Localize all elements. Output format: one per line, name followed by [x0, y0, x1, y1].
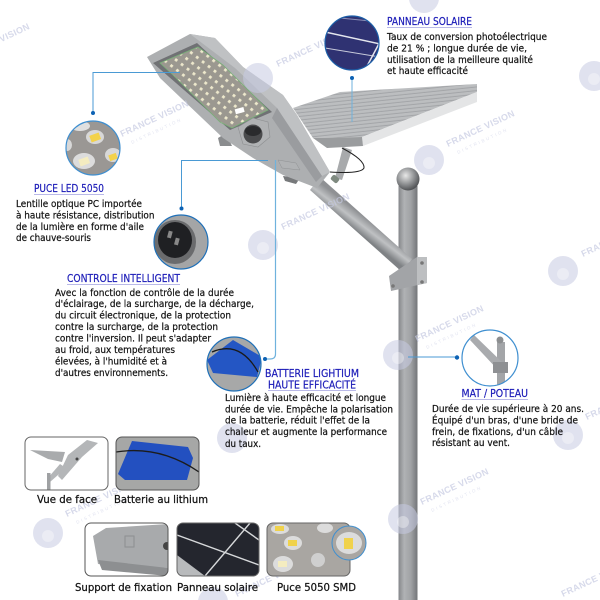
panel text: smart control: au froid, aux températures: [55, 344, 175, 356]
panel text: pole: Équipé d'un bras, d'une bride de: [432, 414, 578, 426]
panel text: solar panel: PANNEAU SOLAIRE: [387, 16, 472, 28]
thumbnail: front view: [25, 437, 108, 490]
panel text: solar panel: et haute efficacité: [387, 65, 468, 77]
panel text: battery: [225, 368, 393, 450]
caption: lithium battery: Batterie au lithium: [114, 493, 208, 506]
watermarks: FRANCE VISION: [275, 28, 346, 69]
panel text: LED chip: de la lumière en forme d'aile: [16, 221, 144, 233]
watermarks: FRANCE VISION: [445, 108, 516, 149]
caption: front view: Vue de face: [37, 493, 97, 506]
panel text: LED chip: de chauve-souris: [16, 233, 91, 244]
panel text: smart control: [55, 273, 254, 379]
watermarks: FRANCE VISION: [419, 466, 490, 507]
lamp head: [147, 34, 340, 188]
panel text: smart control: du circuit électronique, de la protection: [55, 310, 231, 322]
thumbnail: lithium battery: [116, 437, 199, 490]
panel text: pole: résistant au vent.: [432, 437, 510, 449]
panel text: smart control: d'autres environnements.: [55, 368, 168, 379]
icon: LED chip detail: [62, 121, 121, 175]
watermarks: FRANCE VISION: [280, 191, 351, 232]
icon: battery detail: [207, 337, 262, 391]
icon: smart control sensor: [154, 215, 208, 269]
connector: solar panel: [350, 76, 354, 122]
panel text: LED chip: à haute résistance, distribution: [16, 210, 154, 222]
panel text: battery: du taux.: [225, 439, 261, 450]
panel text: pole: frein, de fixations, d'un câble: [432, 426, 563, 438]
panel text: battery: durée de vie. Empêche la polarisation: [225, 404, 393, 416]
watermarks: DISTRIBUTION: [456, 127, 509, 155]
panel text: battery: de la batterie, réduit l'effet de la: [225, 414, 370, 426]
solar panel: [293, 84, 477, 180]
watermarks: DISTRIBUTION: [130, 117, 183, 145]
connector: LED chip: [91, 72, 180, 115]
panel text: smart control: contre l'inversion. Il peut s'adapter: [55, 334, 212, 344]
panel text: LED chip: Lentille optique PC importée: [16, 198, 142, 210]
panel text: solar panel: utilisation de la meilleure qualité: [387, 54, 533, 66]
watermarks: FRANCE VISION: [64, 478, 135, 519]
panel text: pole: [432, 388, 584, 449]
panel text: battery: BATTERIE LIGHTIUM: [265, 368, 359, 380]
watermarks: DISTRIBUTION: [75, 497, 128, 525]
panel text: battery: HAUTE EFFICACITÉ: [268, 378, 356, 392]
panel text: solar panel: [386, 16, 547, 77]
panel text: solar panel: Taux de conversion photoélectrique: [386, 31, 547, 43]
connector: pole: [408, 355, 459, 360]
panel text: battery: chaleur et augmente la performance: [225, 427, 387, 438]
panel text: smart control: d'éclairage, de la surcharge, de la décharge,: [55, 298, 254, 310]
watermarks: FRANCE VISION: [119, 98, 190, 139]
caption: solar panel: Panneau solaire: [177, 581, 258, 594]
icon: pole detail: [462, 330, 518, 390]
panel text: smart control: Avec la fonction de contrôle de la durée: [55, 287, 234, 299]
cable: [330, 148, 364, 172]
panel text: smart control: contre la surcharge, de la protection: [55, 322, 218, 333]
thumbnail: solar panel: [177, 523, 259, 576]
thumbnail: mounting bracket: [85, 523, 171, 576]
connector: battery: [263, 160, 276, 361]
watermarks: FRANCE VISION: [234, 558, 305, 599]
panel text: pole: Durée de vie supérieure à 20 ans.: [432, 403, 584, 415]
pole: [396, 168, 420, 600]
panel text: LED chip: [16, 183, 154, 244]
panel text: solar panel: de 21 % ; longue durée de vie,: [387, 42, 527, 54]
caption: mounting bracket: Support de fixation: [75, 581, 172, 594]
icon: solar panel detail: [325, 16, 382, 70]
watermarks: DISTRIBUTION: [425, 322, 478, 350]
thumbnail: SMD chip: [267, 523, 366, 576]
connector: smart control: [180, 160, 268, 210]
panel text: smart control: CONTROLE INTELLIGENT: [67, 273, 181, 285]
panel text: pole: MAT / POTEAU: [462, 388, 528, 400]
panel text: LED chip: PUCE LED 5050: [34, 183, 104, 195]
watermarks: DISTRIBUTION: [430, 485, 483, 513]
panel text: smart control: élevées, à l'humidité et à: [55, 356, 167, 368]
arm: [310, 177, 427, 291]
caption: SMD chip: Puce 5050 SMD: [277, 581, 356, 594]
panel text: battery: Lumière à haute efficacité et longue: [225, 392, 386, 404]
watermarks: FRANCE VISION: [414, 303, 485, 344]
